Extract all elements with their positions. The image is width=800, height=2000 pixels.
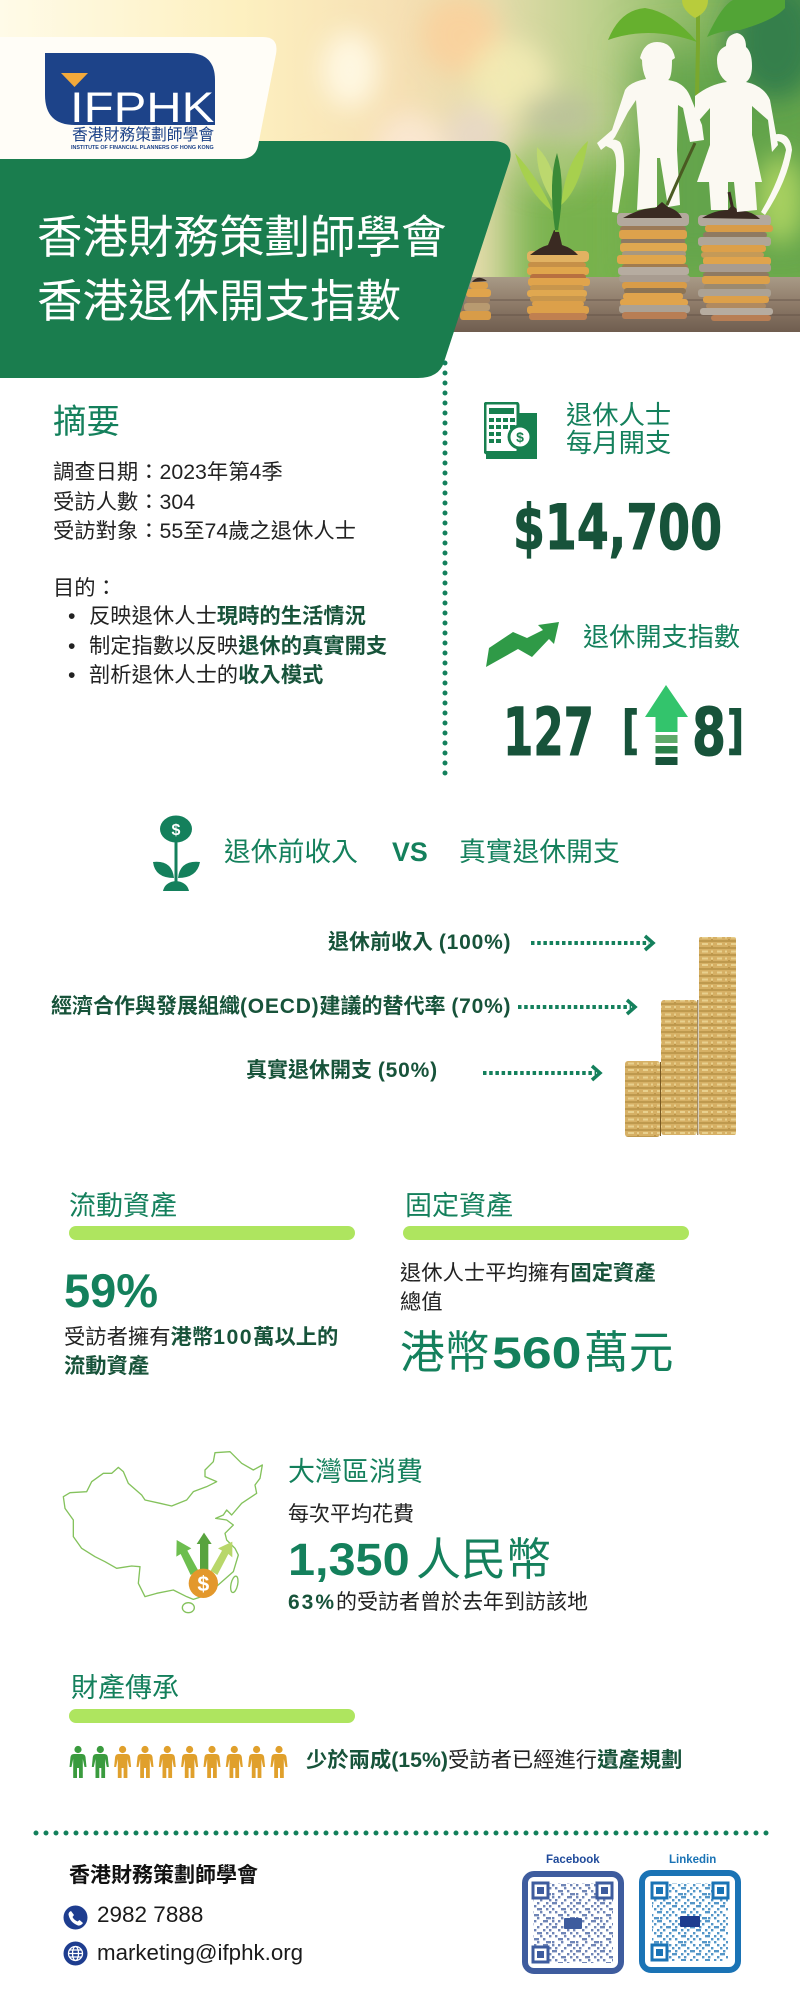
objectives: 剖析退休人士的收入模式 bbox=[89, 663, 323, 687]
row: real retirement expense 50%: 真實退休開支 (50%) bbox=[246, 1059, 438, 1082]
heading: liquid assets: 流動資產 bbox=[69, 1191, 177, 1221]
survey details: 受訪對象：55至74歲之退休人士 bbox=[53, 514, 356, 545]
heading: wealth inheritance: 財產傳承 bbox=[71, 1673, 179, 1703]
title: 香港財務策劃師學會 bbox=[37, 212, 447, 263]
label: monthly spending: 退休人士 bbox=[566, 400, 671, 430]
heading: pre-retirement income vs real expenses bbox=[224, 837, 620, 867]
footer: organisation name: 香港財務策劃師學會 bbox=[69, 1864, 258, 1887]
figure: 127 (8) index bbox=[503, 685, 744, 767]
icon: calculator: $ bbox=[516, 429, 524, 445]
stat: RMB 1,350: 1,350 bbox=[288, 1534, 410, 1585]
stat: 59%: 59% bbox=[64, 1264, 158, 1317]
heading: pre-retirement income vs real expenses: 退休前收入 bbox=[224, 837, 358, 867]
coin stack rows bbox=[460, 213, 773, 321]
label: Linkedin: Linkedin bbox=[669, 1854, 716, 1866]
title: 香港退休開支指數 bbox=[37, 276, 401, 327]
text: phone number: 2982 7888 bbox=[97, 1902, 203, 1927]
objectives: • bbox=[68, 663, 75, 687]
stat: RMB 1,350: 人民幣 bbox=[416, 1534, 551, 1585]
heading: fixed assets: 固定資產 bbox=[405, 1191, 513, 1221]
arrow: 70% bbox=[518, 998, 638, 1016]
heading bar: wealth inheritance bbox=[69, 1709, 355, 1723]
objectives: • bbox=[68, 634, 75, 658]
heading: Greater Bay Area spending: 大灣區消費 bbox=[288, 1457, 423, 1487]
label: retirement expense index: 退休開支指數 bbox=[583, 622, 740, 652]
text: 63% visited: 63%的受訪者曾於去年到訪該地 bbox=[288, 1591, 588, 1614]
logo panel bbox=[0, 37, 276, 159]
map: China outline with money arrows: $ bbox=[197, 1572, 209, 1596]
QR code: Facebook bbox=[522, 1871, 624, 1974]
row: pre-retirement income 100%: 退休前收入 (100%) bbox=[328, 931, 511, 954]
heading: pre-retirement income vs real expenses: 真實退休開支 bbox=[459, 837, 620, 867]
stat: HK$5.6 million: 萬元 bbox=[584, 1329, 673, 1378]
icon: calculator bbox=[484, 402, 537, 459]
objectives: • bbox=[68, 604, 75, 628]
panel: summary bbox=[53, 404, 387, 687]
pictogram: 2 of 10 people bbox=[70, 1746, 288, 1778]
title banner: green panel bbox=[0, 141, 511, 378]
logo panel: IFPHK bbox=[70, 84, 214, 132]
logo panel: 香港財務策劃師學會 bbox=[72, 127, 214, 144]
title bbox=[37, 212, 447, 327]
survey details: 受訪人數：304 bbox=[53, 485, 195, 516]
header photo: coins, seedlings and elderly paper figures bbox=[0, 0, 800, 332]
row: OECD replacement rate 70%: 經濟合作與發展組織(OECD)建議的替代率 (70%) bbox=[51, 995, 511, 1018]
icon: money plant bbox=[153, 816, 200, 891]
objectives: 目的： bbox=[53, 571, 117, 602]
text: liquid assets description: 受訪者擁有港幣100萬以上的 bbox=[64, 1325, 338, 1349]
text: fixed assets description: 退休人士平均擁有固定資產 bbox=[400, 1261, 656, 1285]
label: monthly spending: 每月開支 bbox=[566, 428, 671, 458]
objectives: 反映退休人士現時的生活情況 bbox=[89, 604, 366, 628]
logo panel: INSTITUTE OF FINANCIAL PLANNERS OF HONG KONG bbox=[71, 144, 214, 150]
label: Facebook: Facebook bbox=[546, 1854, 600, 1866]
icon: phone bbox=[64, 1906, 88, 1930]
stat: HK$5.6 million bbox=[400, 1329, 673, 1378]
heading bar: fixed assets bbox=[403, 1226, 689, 1240]
arrow: 100% bbox=[531, 934, 656, 952]
chart: coin stacks bbox=[625, 937, 736, 1137]
objectives: 制定指數以反映退休的真實開支 bbox=[89, 634, 387, 658]
icon: web globe bbox=[64, 1942, 88, 1966]
stat: HK$5.6 million: 560 bbox=[492, 1329, 581, 1378]
heading: summary: 摘要 bbox=[53, 404, 120, 441]
arrow: 50% bbox=[483, 1064, 603, 1082]
QR code: Linkedin bbox=[639, 1870, 741, 1973]
heading bar: liquid assets bbox=[69, 1226, 355, 1240]
heading: pre-retirement income vs real expenses: VS bbox=[392, 837, 428, 867]
text: liquid assets description bbox=[64, 1325, 338, 1378]
stat: RMB 1,350 bbox=[288, 1534, 551, 1585]
stat: HK$5.6 million: 港幣 bbox=[400, 1329, 489, 1378]
label: monthly spending bbox=[566, 400, 671, 458]
text: average per-trip spending: 每次平均花費 bbox=[288, 1503, 414, 1526]
objectives bbox=[53, 571, 387, 687]
text: estate planning: 少於兩成(15%)受訪者已經進行遺產規劃 bbox=[306, 1748, 682, 1772]
text: liquid assets description: 流動資產 bbox=[64, 1354, 149, 1378]
text: fixed assets description bbox=[400, 1261, 656, 1314]
survey details bbox=[53, 455, 356, 545]
text: email: marketing@ifphk.org bbox=[97, 1940, 303, 1965]
icon: rising trend arrow bbox=[486, 622, 559, 667]
map: China outline with money arrows bbox=[62, 1451, 263, 1614]
icon: money plant: $ bbox=[172, 822, 181, 839]
text: fixed assets description: 總值 bbox=[400, 1290, 443, 1314]
survey details: 調查日期：2023年第4季 bbox=[53, 455, 283, 486]
figure: 127 (8) index: [ bbox=[622, 701, 639, 761]
